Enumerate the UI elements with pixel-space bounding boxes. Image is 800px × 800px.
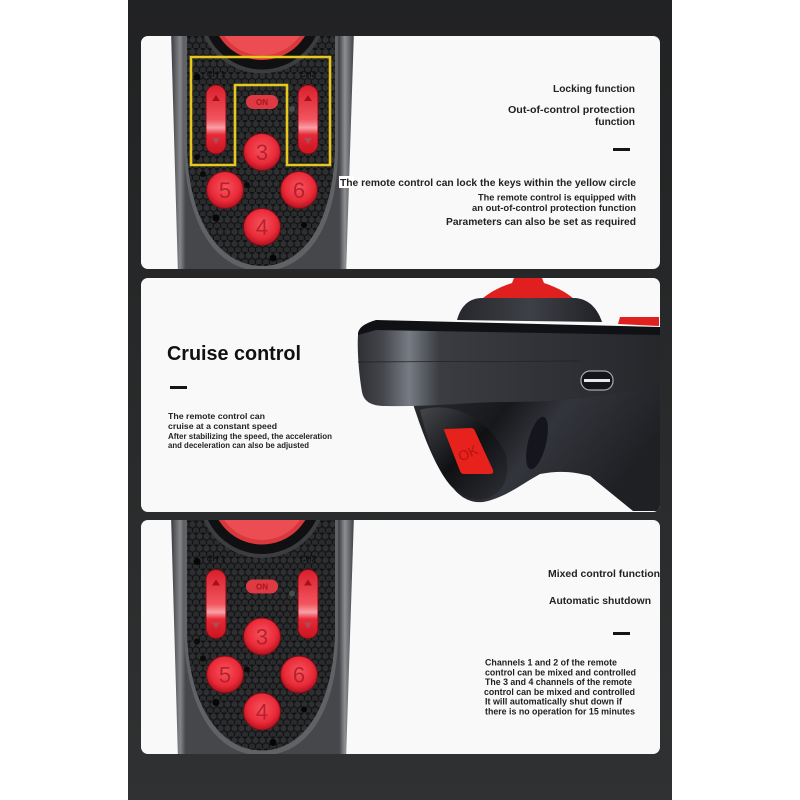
- mixed control description: control can be mixed and controlled: [484, 687, 635, 697]
- mixed control description: there is no operation for 15 minutes: [485, 706, 635, 716]
- panel: cruise control: [141, 278, 660, 512]
- remote control: 6: [293, 662, 305, 688]
- mixed control description: It will automatically shut down if: [485, 696, 623, 706]
- feature description: [339, 176, 636, 228]
- cruise description: The remote control can: [168, 411, 265, 421]
- feature headings: Automatic shutdown: [549, 596, 651, 607]
- feature description: The remote control can lock the keys within the yellow circle: [340, 178, 636, 189]
- dark page background: [128, 0, 672, 800]
- heading: cruise control: Cruise control: [167, 343, 301, 365]
- remote control with yellow lock outline: [171, 36, 354, 269]
- remote control: 4: [256, 700, 268, 724]
- feature description: an out-of-control protection function: [472, 203, 636, 214]
- feature headings: [508, 84, 635, 128]
- remote control: CH 1: [207, 554, 226, 564]
- panel: mixed control: [141, 520, 660, 754]
- buttons: [206, 85, 226, 154]
- remote control: 3: [256, 624, 268, 650]
- feature description: The remote control is equipped with: [478, 192, 636, 204]
- cruise description: [168, 411, 332, 450]
- remote control with yellow lock outline: ON: [256, 98, 268, 107]
- remote control: ON: [256, 582, 268, 592]
- mixed control description: The 3 and 4 channels of the remote: [485, 677, 632, 687]
- remote control with yellow lock outline: 5: [219, 178, 231, 203]
- accent bar: [613, 148, 630, 151]
- cruise description: cruise at a constant speed: [168, 421, 277, 431]
- gamepad side view: [358, 278, 660, 511]
- remote control: 5: [219, 662, 231, 688]
- feature headings: [548, 569, 660, 607]
- feature headings: Locking function: [553, 84, 635, 95]
- gamepad side view: OK: [455, 441, 481, 465]
- cruise description: After stabilizing the speed, the acceleration: [168, 431, 332, 441]
- accent bar: [613, 632, 630, 635]
- remote control with yellow lock outline: 4: [256, 215, 268, 240]
- remote control with yellow lock outline: CH 1: [207, 70, 226, 79]
- panel: locking function: [141, 36, 660, 269]
- mixed control description: control can be mixed and controlled: [485, 668, 636, 678]
- remote control with yellow lock outline: CH2: [300, 70, 317, 79]
- cruise description: and deceleration can also be adjusted: [168, 440, 309, 450]
- mixed control description: Channels 1 and 2 of the remote: [485, 658, 617, 668]
- feature headings: function: [595, 117, 635, 128]
- remote control: [171, 520, 354, 754]
- feature description: Parameters can also be set as required: [446, 217, 636, 228]
- feature headings: Out-of-control protection: [508, 105, 635, 116]
- remote control with yellow lock outline: 6: [293, 178, 305, 203]
- feature headings: Mixed control function: [548, 569, 660, 580]
- accent bar: [170, 386, 187, 389]
- remote control: CH2: [300, 554, 317, 564]
- mixed control description: [484, 658, 636, 716]
- remote control with yellow lock outline: 3: [256, 140, 268, 165]
